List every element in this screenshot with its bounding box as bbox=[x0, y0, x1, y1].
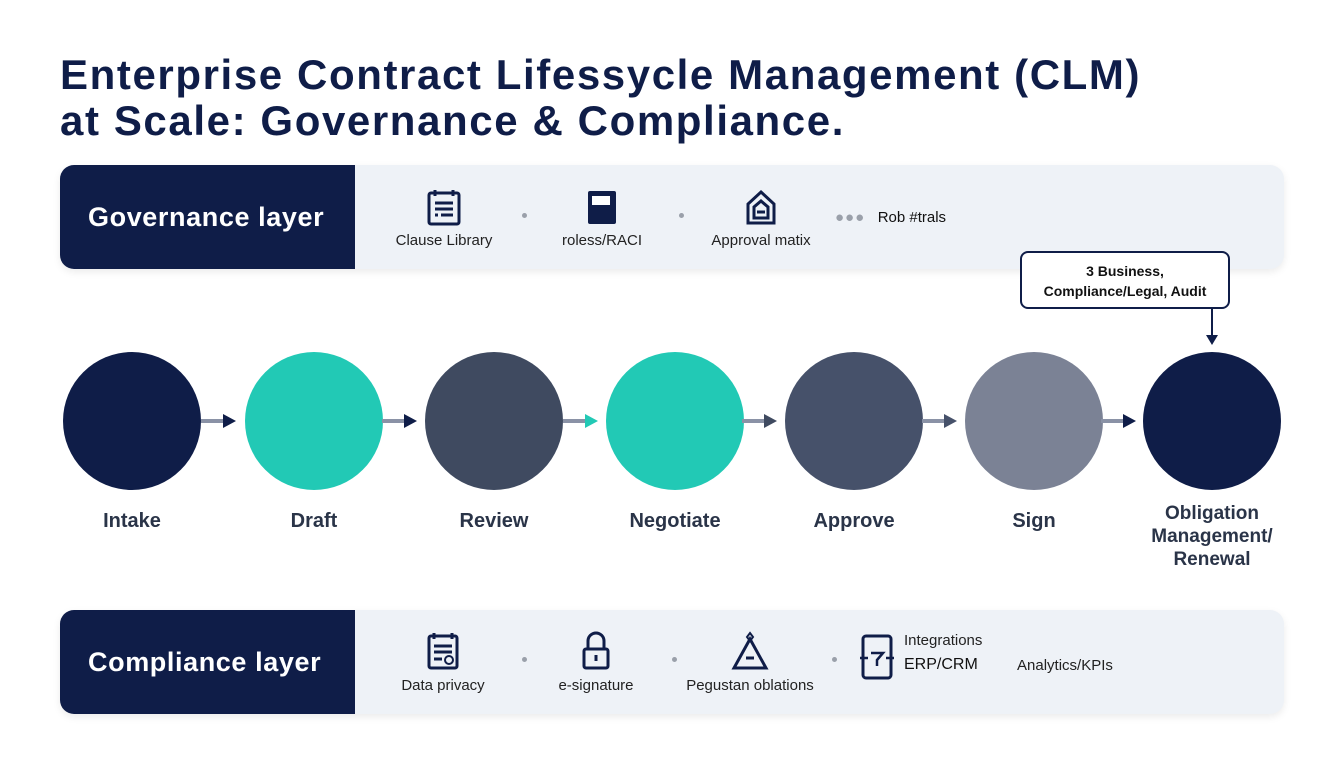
step: draft bbox=[245, 352, 383, 532]
item: e-signature: e-signature bbox=[558, 677, 634, 694]
item: clause library: Clause Library bbox=[396, 232, 492, 249]
arrow bbox=[382, 414, 417, 428]
step: obligation management bbox=[1143, 352, 1281, 570]
heading: compliance layer bbox=[60, 610, 355, 714]
item: rob trals: ●●● Rob #trals bbox=[835, 209, 946, 226]
arrow bbox=[742, 414, 777, 428]
arrow: callout to obligation bbox=[1206, 309, 1218, 345]
item: data privacy bbox=[401, 633, 485, 694]
callout: 3 Business, bbox=[1086, 263, 1164, 279]
process flow: Management/ bbox=[1151, 526, 1273, 547]
process flow: Approve bbox=[813, 510, 895, 532]
step: intake bbox=[63, 352, 201, 532]
item: roles/RACI: roless/RACI bbox=[562, 232, 642, 249]
panel: governance layer bbox=[60, 165, 1284, 269]
heading: compliance layer: Compliance layer bbox=[88, 647, 321, 677]
title bbox=[60, 51, 1141, 144]
item: clause library bbox=[396, 190, 492, 249]
process flow bbox=[63, 352, 1281, 570]
item: integrations ERP/CRM bbox=[860, 632, 982, 680]
item: analytics/KPIs: Analytics/KPIs bbox=[1017, 657, 1113, 674]
process flow: Renewal bbox=[1173, 549, 1251, 570]
item: roles/RACI bbox=[562, 191, 642, 249]
arrow bbox=[1101, 414, 1136, 428]
arrow bbox=[563, 414, 598, 428]
title: Enterprise Contract Lifessycle Management (CLM) bbox=[60, 51, 1141, 98]
arrow bbox=[201, 414, 236, 428]
panel: compliance layer bbox=[60, 610, 1284, 714]
step: sign bbox=[965, 352, 1103, 532]
item: e-signature bbox=[558, 632, 634, 694]
arrow bbox=[922, 414, 957, 428]
process flow: Review bbox=[460, 510, 528, 532]
process flow: Obligation bbox=[1165, 503, 1259, 524]
item: integrations ERP/CRM: ERP/CRM bbox=[904, 656, 978, 673]
process flow: Sign bbox=[1012, 510, 1056, 532]
item: regulatory obligations bbox=[686, 632, 814, 694]
heading: governance layer bbox=[60, 165, 355, 269]
title: at Scale: Governance & Compliance. bbox=[60, 97, 845, 144]
item: approval matrix bbox=[711, 190, 811, 249]
item: data privacy: Data privacy bbox=[401, 677, 485, 694]
callout: Compliance/Legal, Audit bbox=[1044, 283, 1206, 299]
item: regulatory obligations: Pegustan oblations bbox=[686, 677, 814, 694]
process flow: Negotiate bbox=[629, 510, 721, 532]
process flow: Draft bbox=[291, 510, 337, 532]
process flow: Intake bbox=[103, 510, 161, 532]
step: approve bbox=[785, 352, 923, 532]
heading: governance layer: Governance layer bbox=[88, 202, 324, 232]
item: approval matrix: Approval matix bbox=[711, 232, 811, 249]
step: negotiate bbox=[606, 352, 744, 532]
step: review bbox=[425, 352, 563, 532]
callout bbox=[1020, 251, 1230, 309]
item: integrations ERP/CRM: Integrations bbox=[904, 632, 982, 649]
